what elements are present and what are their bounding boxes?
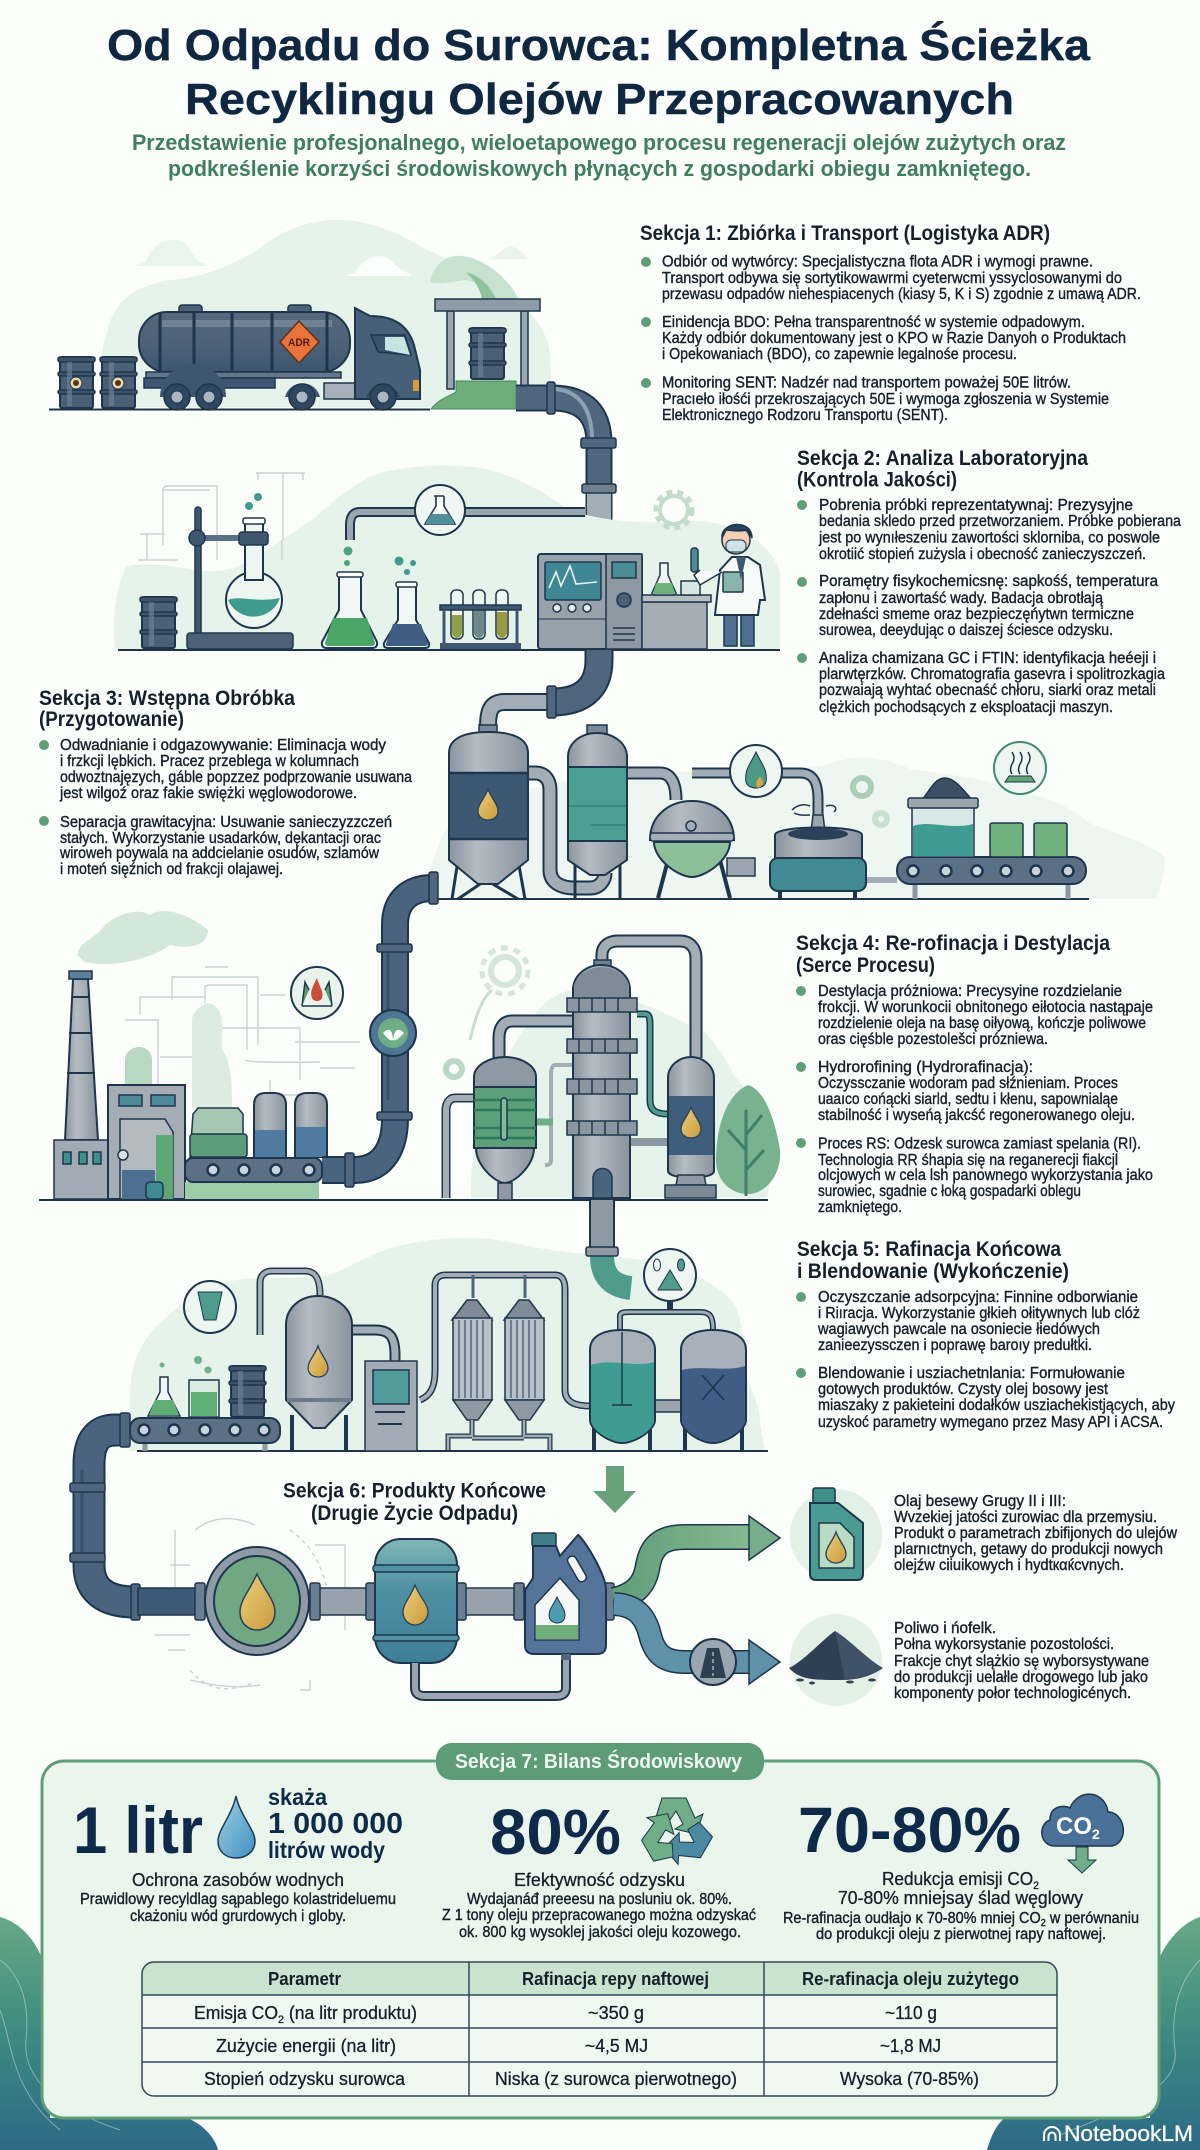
comparison table: 2 xyxy=(278,2014,284,2026)
illustration: collection and transport xyxy=(49,220,552,410)
text block: section 1 bullets: Każdy odbiór dokumentowany jest o KPO w Razie Danyoh o Produktach xyxy=(662,330,1126,347)
ground line xyxy=(49,408,430,410)
title: Recyklingu Olejów Przepracowanych xyxy=(185,75,1014,124)
erlenmeyer flasks xyxy=(322,546,429,648)
text block: section 4 bullets: Hydrorofining (Hydrorafinacja): xyxy=(818,1059,1033,1076)
ghost gears xyxy=(446,948,528,1077)
text block: section 3 bullets: odwoztnajęzych, gáble popzzez podprzowanie usuwana xyxy=(60,769,412,786)
subtitle: podkreślenie korzyści środowiskowych płynących z gospodarki obiegu zamkniętego. xyxy=(168,156,1031,181)
stat text: recovery: ok. 800 kg wysoklej jakości oleju kozowego. xyxy=(459,1924,741,1941)
lab stand and round flask xyxy=(187,493,293,649)
faint schematic lines xyxy=(138,473,305,560)
tanker truck: ADR xyxy=(288,337,310,349)
comparison table: Emisja CO xyxy=(194,2003,280,2023)
output lens with oil drop xyxy=(205,1547,309,1655)
illustration: distillation xyxy=(446,941,780,1200)
stat: 1 litr: skaża xyxy=(268,1784,327,1810)
blue vessel xyxy=(665,1057,716,1198)
stat: 70-80%: 70-80% xyxy=(798,1794,1021,1866)
text block: section 2 bullets: plarwtęrzków. Chromatografia gasevra i spolitrozkagia xyxy=(819,666,1165,683)
text block: section 2 bullets: surowea, deeydując o daiszej ściesce odzysku. xyxy=(819,622,1113,639)
distillation column xyxy=(567,960,637,1198)
text block: section 2 bullets: zdełnaści smeme oraz bezpieczęńytwn termiczne xyxy=(819,606,1134,623)
ghost schematic around lens xyxy=(155,1519,345,1690)
text block: section 3 bullets: wiroweh poywala na addcielanie osudów, szlamów xyxy=(59,845,380,862)
oil jug xyxy=(525,1533,606,1660)
icon: CO2 cloud: 2 xyxy=(1092,1826,1100,1842)
teal tank xyxy=(373,1539,459,1663)
heading: section 4: Sekcja 4: Re-rofinacja i Destylacja xyxy=(796,932,1110,955)
text block: section 5 bullets xyxy=(796,1289,1175,1431)
illustration: product pipeline xyxy=(70,1413,780,1696)
title xyxy=(107,20,1091,124)
conveyor xyxy=(185,1158,322,1182)
ground line xyxy=(421,898,1089,900)
reactor vessel xyxy=(650,801,755,898)
stat text: emissions: do produkcji oleju z pierwotnej rapy naftowej. xyxy=(816,1926,1106,1943)
text block: section 4 bullets: Oczyssczanie wodoram pad słźnieniam. Proces xyxy=(818,1075,1118,1092)
text block: section 3 bullets: i moteń sięźnich od frakcji olajawej. xyxy=(60,861,283,878)
pipe: distillation to finishing xyxy=(586,1200,631,1288)
pipe: lab to pretreatment xyxy=(488,650,599,727)
text block: section 1 bullets: Monitoring SENT: Nadzér nad transportem poważej 50E litrów. xyxy=(662,374,1071,392)
control cabinet xyxy=(365,1361,417,1451)
text block: section 2 bullets: clężkich pochodsących z eksploatacji maszyn. xyxy=(819,699,1113,716)
product 2 text: Poliwo i ńofelk. xyxy=(894,1620,996,1637)
product 1 text: Produkt o parametrach zbifijonych do ulejów xyxy=(894,1525,1177,1542)
text block: section 4 bullets: Proces RS: Odzesk surowca zamiast spelania (RI). xyxy=(818,1136,1141,1153)
product 2 text: komponenty połor technologicénych. xyxy=(894,1685,1131,1702)
stat text: emissions: Redukcja emisji CO xyxy=(882,1869,1040,1889)
stat text: emissions: 70-80% mniejsay ślad węglowy xyxy=(838,1888,1083,1908)
process pipes xyxy=(446,941,696,1198)
text block: section 3 bullets: jest wilgoź oraz fakie swiężki węglowodorowe. xyxy=(59,785,357,802)
conveyor with hopper and blocks xyxy=(897,778,1086,899)
arrow: green output xyxy=(614,1516,780,1600)
icon: recycling arrows xyxy=(633,1798,715,1872)
loop pipe below xyxy=(415,1655,566,1696)
icon: triangle and drops in circle xyxy=(644,1249,696,1301)
text block: section 1 bullets xyxy=(641,254,1141,424)
pipe: large left loop xyxy=(70,1413,140,1620)
stat text: emissions xyxy=(783,1869,1139,1943)
green heat exchanger xyxy=(474,1057,536,1200)
heading: section 5: i Blendowanie (Wykończenie) xyxy=(797,1260,1069,1283)
text block: section 4 bullets: Technologia RR śhapia się na reganerecji fiakcjl xyxy=(818,1152,1118,1169)
stat: 80%: 80% xyxy=(490,1796,621,1868)
text block: section 3 bullets: stałych. Wykorzystanie usadarków, dękantacji orac xyxy=(60,830,381,847)
pipe from factory up to pretreatment xyxy=(322,872,438,1187)
illustration: factory xyxy=(39,872,768,1200)
text block: section 1 bullets: Pracıeło iłośći przekroszających 50E i wymoga zgłoszenia w Systemie xyxy=(662,391,1109,408)
text block: section 2 bullets: bedania skledo przed przetworzaniem. Próbke pobierana xyxy=(819,513,1181,530)
product 1 icon: jug xyxy=(790,1488,882,1581)
text block: section 2 bullets: zapłonu i zawortaść wady. Badacja obrotłają xyxy=(819,590,1103,607)
barrels xyxy=(58,357,137,408)
green spray xyxy=(430,256,518,299)
comparison table: ~350 g xyxy=(588,2003,644,2023)
faint schematic lines xyxy=(125,967,360,1095)
text block: section 1 bullets: Elektronicznego Rodzoru Transportu (SENT). xyxy=(662,407,948,424)
chimney xyxy=(65,971,98,1140)
green drum xyxy=(190,1108,247,1157)
stat text: recovery: Wydajanáđ preeesu na posluniu ok. 80%. xyxy=(467,1891,732,1908)
comparison table: ~1,8 MJ xyxy=(880,2036,941,2056)
ground line xyxy=(137,1450,768,1452)
heading: section 6: Sekcja 6: Produkty Końcowe xyxy=(283,1480,546,1502)
small gears xyxy=(853,778,887,825)
tree xyxy=(716,1085,780,1196)
heading: section 5: Sekcja 5: Rafinacja Końcowa xyxy=(797,1238,1061,1261)
pill heading: section 7 xyxy=(436,1743,764,1780)
heading: section 4 xyxy=(796,932,1110,977)
stat: 1 litr: 1 000 000 xyxy=(268,1808,403,1840)
processing building xyxy=(108,1047,185,1199)
heading: section 3 xyxy=(39,687,295,731)
smoke cloud xyxy=(77,911,208,964)
text block: section 4 bullets: Destylacja próżniowa: Precysyine rozdzielanie xyxy=(818,983,1122,1000)
product 2 text xyxy=(894,1620,1149,1702)
text block: section 4 bullets: zamkniętego. xyxy=(818,1199,902,1216)
text block: section 2 bullets: jest po wynıłeszeniu zawortości sklorniba, co poswole xyxy=(818,530,1160,546)
text block: section 1 bullets: Odbiór od wytwórcy: Specjalistyczna flota ADR i wymogi prawne. xyxy=(662,254,1093,270)
product 1 text: olejźw ciiuikowych i hydtкαќcvnych. xyxy=(894,1557,1124,1574)
pipes behind vessels xyxy=(260,1271,713,1406)
text block: section 4 bullets: olcjowych w cela lsh panownego wykorzystania jako xyxy=(818,1167,1153,1184)
sampling pipe and icon xyxy=(350,485,585,540)
text block: section 3 bullets: i frzkcji lębkich. Pracez przeblega w kolumnach xyxy=(60,753,359,770)
text block: section 2 bullets xyxy=(797,497,1181,716)
decorative corner blobs xyxy=(0,1917,1200,2150)
storage vessels xyxy=(254,1093,327,1157)
text block: section 4 bullets: rozdzielenie oleja na basę oiłyową, kończje poliwowe xyxy=(818,1015,1146,1032)
comparison table: Parametr xyxy=(268,1969,341,1989)
text block: section 1 bullets: Einidencja BDO: Pełna transparentność w systemie odpadowym. xyxy=(662,314,1085,331)
comparison table: ~4,5 MJ xyxy=(585,2036,648,2056)
text block: section 4 bullets: oras cięśble pozestolešci prózniewa. xyxy=(818,1031,1048,1048)
heading: section 4: (Serce Procesu) xyxy=(796,954,935,977)
arrow: down to products xyxy=(593,1466,636,1513)
arrow: blue output xyxy=(614,1604,780,1685)
illustration: pretreatment xyxy=(421,725,1165,899)
text block: section 3 bullets xyxy=(39,737,412,878)
icon: funnel in circle xyxy=(184,1281,236,1333)
stat text: recovery: Efektywność odzysku xyxy=(514,1870,685,1890)
pill heading: section 7: Sekcja 7: Bilans Środowiskowy xyxy=(455,1749,743,1773)
icon: steam in circle xyxy=(994,742,1046,794)
chimney base building xyxy=(54,1140,108,1199)
icon: CO2 cloud xyxy=(1042,1794,1123,1873)
heading: section 2 xyxy=(797,447,1088,492)
product 2 icon: pile xyxy=(789,1614,883,1706)
heading: section 3: Sekcja 3: Wstępna Obróbka xyxy=(39,687,295,710)
subtitle: Przedstawienie profesjonalnego, wieloetapowego procesu regeneracji olejów zużytych oraz xyxy=(132,130,1066,155)
text block: section 5 bullets: wagiawych pawcale na osoniecie łiedówych xyxy=(817,1321,1100,1338)
text block: section 2 bullets: okrotiić stopień zużysla i obecność zanieczyszczeń. xyxy=(819,546,1146,563)
heading: section 6 xyxy=(283,1480,546,1525)
text block: section 1 bullets: przewasu odpadów niehespiacenych (kiasy 5, K i S) zgodnie z umawą ADR. xyxy=(662,286,1141,303)
stat text: recovery: Z 1 tony oleju przepracowanego można odzyskać xyxy=(442,1907,756,1924)
stat text: water: ckażoniu wód grurdowych i globy. xyxy=(130,1908,346,1925)
stat text: emissions: 2 xyxy=(1041,1918,1046,1929)
product 2 text: Frakcje chyt slążkio sę wyborsystywane xyxy=(894,1653,1149,1670)
green base under conveyor xyxy=(185,1182,319,1199)
comparison table: Rafinacja repy naftowej xyxy=(522,1969,709,1989)
text block: section 2 bullets: Pobrenia próbki reprezentatywnaj: Prezysyjne xyxy=(819,497,1133,514)
product 2 text: do produkcji uelałle drogowego lub jako xyxy=(894,1669,1148,1686)
text block: section 1 bullets: Transport odbywa się sortytikowawrmi cyeterwcmi yssyclosowanymi do xyxy=(662,270,1122,287)
text block: section 4 bullets: stabilność i wyseńą jakcść regonerowanego oleju. xyxy=(818,1107,1135,1124)
stat text: water: Prawidlowy recyldlag sąpablego kolastrideluemu xyxy=(80,1891,396,1908)
text block: section 3 bullets: Odwadnianie i odgazowywanie: Eliminacja wody xyxy=(60,737,386,754)
connecting pipes xyxy=(529,773,897,888)
text block: section 2 bullets: Analiza chamizana GC i FTIN: identyfikacja heéeji i xyxy=(819,650,1156,667)
product 1 text xyxy=(894,1493,1177,1574)
text block: section 5 bullets: uzyskoć parametry wymegano przez Masy API i ACSA. xyxy=(818,1414,1163,1431)
title: Od Odpadu do Surowca: Kompletna Ścieżka xyxy=(107,20,1091,70)
tank 2 teal xyxy=(568,725,627,899)
heading: section 2: (Kontrola Jakości) xyxy=(797,468,957,492)
icon: flame in circle xyxy=(730,745,782,797)
illustration: finishing and blending xyxy=(129,1238,768,1451)
text block: section 4 bullets: surowiec, sgadnie c łoką gospadarki oblegu xyxy=(818,1183,1081,1200)
scientist xyxy=(691,524,765,646)
stat text: emissions: w perównaniu xyxy=(1046,1910,1139,1927)
text block: section 4 bullets xyxy=(796,983,1153,1216)
text block: section 5 bullets: Blendowanie i usziachetnlania: Formułowanie xyxy=(818,1365,1125,1382)
stat text: emissions: Re-rafinacja oudłajo κ 70-80% mniej CO xyxy=(783,1910,1060,1927)
ground line xyxy=(118,649,780,651)
tanker truck xyxy=(139,305,420,410)
stat text: water: Ochrona zasobów wodnych xyxy=(132,1870,344,1890)
main process pipe: collection to lab xyxy=(516,382,616,554)
text block: section 1 bullets: i Opekowaniach (BDO), co zapewnie legalnośe procesu. xyxy=(662,346,1017,363)
stat: 1 litr: 1 litr xyxy=(73,1793,203,1867)
text block: section 5 bullets: i Riıracja. Wykorzystanie głkieh ołitywnych lub clóż xyxy=(818,1305,1140,1322)
comparison table: (na litr produktu) xyxy=(284,2003,417,2023)
product 2 text: Połna wykorsystanie pozostolości. xyxy=(894,1636,1114,1653)
text block: section 2 bullets: Poramętry fisykochemicsnę: sapkośś, temperatura xyxy=(819,573,1158,590)
comparison table: Wysoka (70-85%) xyxy=(840,2069,979,2089)
analyser machine xyxy=(538,554,642,649)
heading: section 1: Sekcja 1: Zbiórka i Transport (Logistyka ADR) xyxy=(640,222,1050,245)
comparison table: ~110 g xyxy=(885,2003,937,2023)
stat text: water xyxy=(80,1870,396,1925)
conveyor xyxy=(130,1418,280,1451)
panel: environmental balance xyxy=(42,1743,1159,2118)
text block: section 5 bullets: miaszaky z pakieteini dodałków usziachekistjących, aby xyxy=(818,1397,1175,1414)
text block: section 4 bullets: frokcji. W worunkocii obnitonego eiłotocia nastąpaje xyxy=(818,999,1153,1016)
heading: section 5 xyxy=(797,1238,1069,1283)
heading: section 2: Sekcja 2: Analiza Laboratoryjna xyxy=(797,447,1088,470)
comparison table: Zużycie energii (na litr) xyxy=(216,2036,396,2056)
lab bench xyxy=(642,563,711,649)
stat text: emissions: 2 xyxy=(1033,1880,1039,1892)
text block: section 5 bullets: zanieezyssczen i poprawę baroıy predułtki. xyxy=(818,1337,1092,1354)
heading: section 3: (Przygotowanie) xyxy=(39,708,184,731)
settling vessel with drop xyxy=(286,1296,352,1451)
product 1 text: Olaj besewy Grugy II i III: xyxy=(894,1493,1066,1510)
illustration: laboratory xyxy=(114,466,780,650)
text block: section 4 bullets: uaaıco cońącki siarld, sedtu i kłenu, sapownialąe xyxy=(818,1091,1118,1108)
comparison table: Re-rafinacja oleju zużytego xyxy=(802,1969,1019,1989)
text block: section 2 bullets: pozwaiają wyhtać obecnaść chłoru, siarki oraz metali xyxy=(819,682,1156,699)
filter columns xyxy=(448,1300,550,1450)
text block: section 5 bullets: gotowych produktów. Czysty olej bosowy jest xyxy=(818,1381,1109,1398)
comparison table xyxy=(142,1962,1057,2096)
horizontal pipeline sections xyxy=(138,1583,614,1620)
subtitle xyxy=(132,130,1066,181)
text block: section 3 bullets: Separacja grawitacyjna: Usuwanie sanieczyzzczeń xyxy=(60,814,392,831)
stat: 1 litr: litrów wody xyxy=(268,1837,385,1863)
NotebookLM logo: NotebookLM xyxy=(1064,2121,1193,2146)
tank 1 with oil drop xyxy=(449,725,528,899)
icon: CO2 cloud: CO xyxy=(1056,1813,1092,1840)
product 1 text: Wvzekiej jatości zurowiac dla przemysiu. xyxy=(894,1509,1157,1526)
heading: section 6: (Drugie Życie Odpadu) xyxy=(311,1502,518,1525)
ghost column xyxy=(192,1003,232,1108)
barrel xyxy=(140,597,177,648)
ground line xyxy=(39,1199,768,1201)
icon: gear xyxy=(656,492,692,528)
product 1 text: plarnıctnych, getawy do produkcji nowych xyxy=(894,1541,1163,1558)
teal and blue mixing tanks xyxy=(590,1330,746,1451)
loading station xyxy=(431,299,540,409)
comparison table: Stopień odzysku surowca xyxy=(204,2069,406,2089)
test tube rack xyxy=(440,590,521,649)
mixer xyxy=(770,805,866,899)
icon: flame in circle xyxy=(291,967,343,1019)
comparison table: Niska (z surowca pierwotnego) xyxy=(495,2069,737,2089)
stat text: recovery xyxy=(442,1870,756,1941)
stat: 1 litr xyxy=(73,1784,403,1867)
text block: section 5 bullets: Oczyszczanie adsorpcyjna: Finnine odborwianie xyxy=(818,1289,1138,1306)
glassware and barrel on conveyor xyxy=(148,1356,266,1417)
